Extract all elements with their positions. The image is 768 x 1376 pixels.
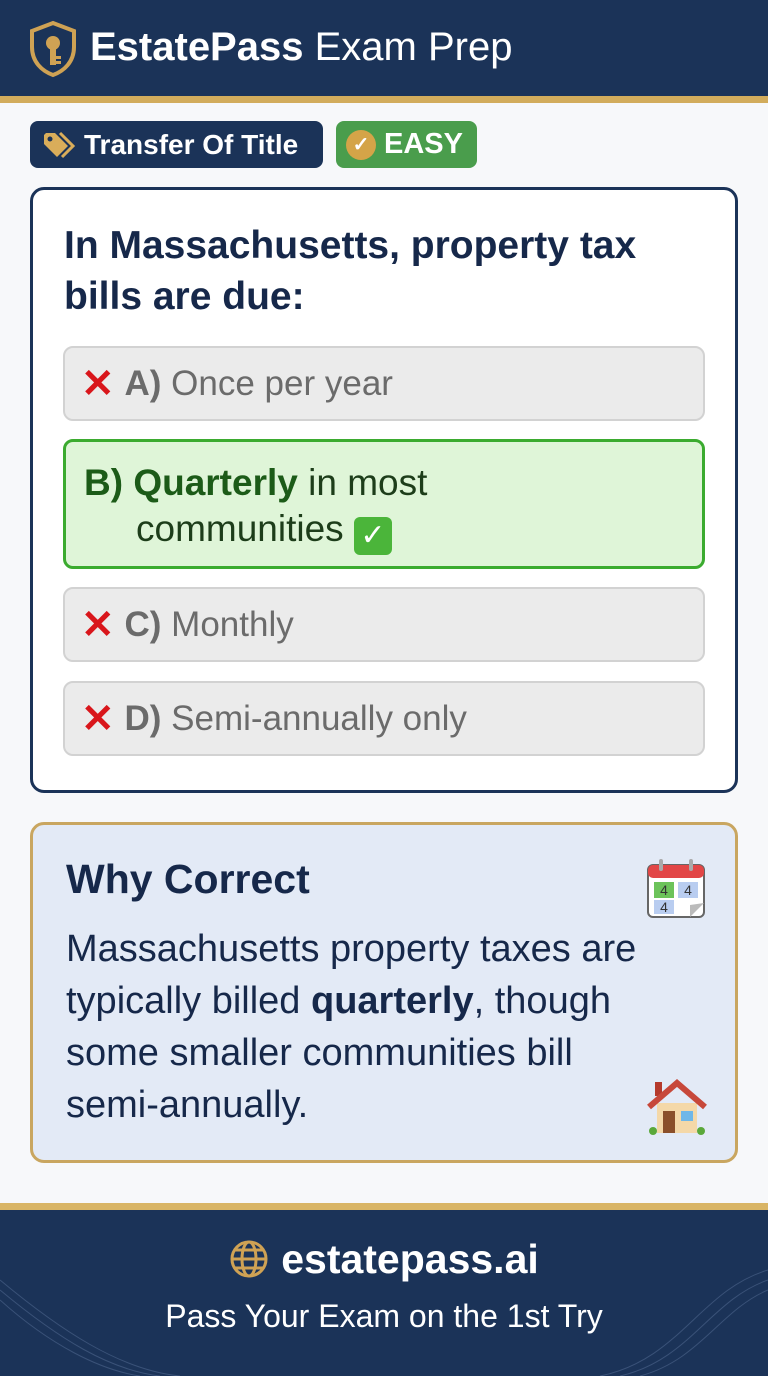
title: EstatePass Exam Prep bbox=[90, 25, 512, 69]
option D: D) bbox=[125, 698, 161, 738]
icon: calendar: 4 bbox=[684, 882, 692, 898]
option C: C) bbox=[125, 604, 161, 644]
option D: ✕ bbox=[81, 696, 115, 740]
tag: difficulty: ✓ bbox=[353, 134, 369, 156]
question text bbox=[64, 224, 636, 318]
option C: ✕ bbox=[81, 602, 115, 646]
footer url with globe: estatepass.ai bbox=[281, 1236, 539, 1282]
header bbox=[0, 0, 768, 103]
option A: ✕ bbox=[81, 362, 115, 406]
option A bbox=[63, 346, 705, 421]
question text: bills are due: bbox=[64, 275, 305, 318]
tagline: Pass Your Exam on the 1st Try bbox=[165, 1298, 603, 1334]
explanation text: some smaller communities bill bbox=[66, 1032, 573, 1074]
option B correct: B) Quarterly in most bbox=[84, 462, 427, 503]
tag: topic: Transfer Of Title bbox=[84, 128, 298, 160]
option A: A) bbox=[125, 364, 161, 402]
tag: topic bbox=[30, 121, 323, 168]
explanation text: semi-annually. bbox=[66, 1084, 308, 1126]
icon: calendar: 4 bbox=[660, 882, 668, 898]
icon: calendar bbox=[647, 859, 705, 918]
option C bbox=[63, 587, 705, 662]
explanation text bbox=[66, 928, 636, 1126]
option B correct: ✓ bbox=[360, 519, 386, 552]
option B correct bbox=[63, 439, 705, 569]
icon: shield key bbox=[30, 20, 76, 78]
option D: Semi-annually only bbox=[171, 698, 467, 738]
tag: difficulty: EASY bbox=[384, 128, 463, 160]
option B correct: communities bbox=[136, 508, 344, 549]
panel: why correct bbox=[30, 822, 738, 1163]
option C: Monthly bbox=[171, 604, 294, 644]
tag: difficulty bbox=[336, 121, 477, 168]
icon: house bbox=[647, 1079, 707, 1135]
explanation text: typically billed quarterly, though bbox=[66, 980, 611, 1022]
option D bbox=[63, 681, 705, 756]
footer bbox=[0, 1203, 768, 1376]
explanation text: Massachusetts property taxes are bbox=[66, 928, 636, 970]
heading: Why Correct bbox=[66, 856, 310, 902]
option A: Once per year bbox=[171, 364, 393, 402]
footer wave lines bbox=[0, 1270, 768, 1376]
question text: In Massachusetts, property tax bbox=[64, 224, 636, 267]
icon: calendar: 4 bbox=[660, 899, 668, 915]
panel: question bbox=[30, 187, 738, 793]
